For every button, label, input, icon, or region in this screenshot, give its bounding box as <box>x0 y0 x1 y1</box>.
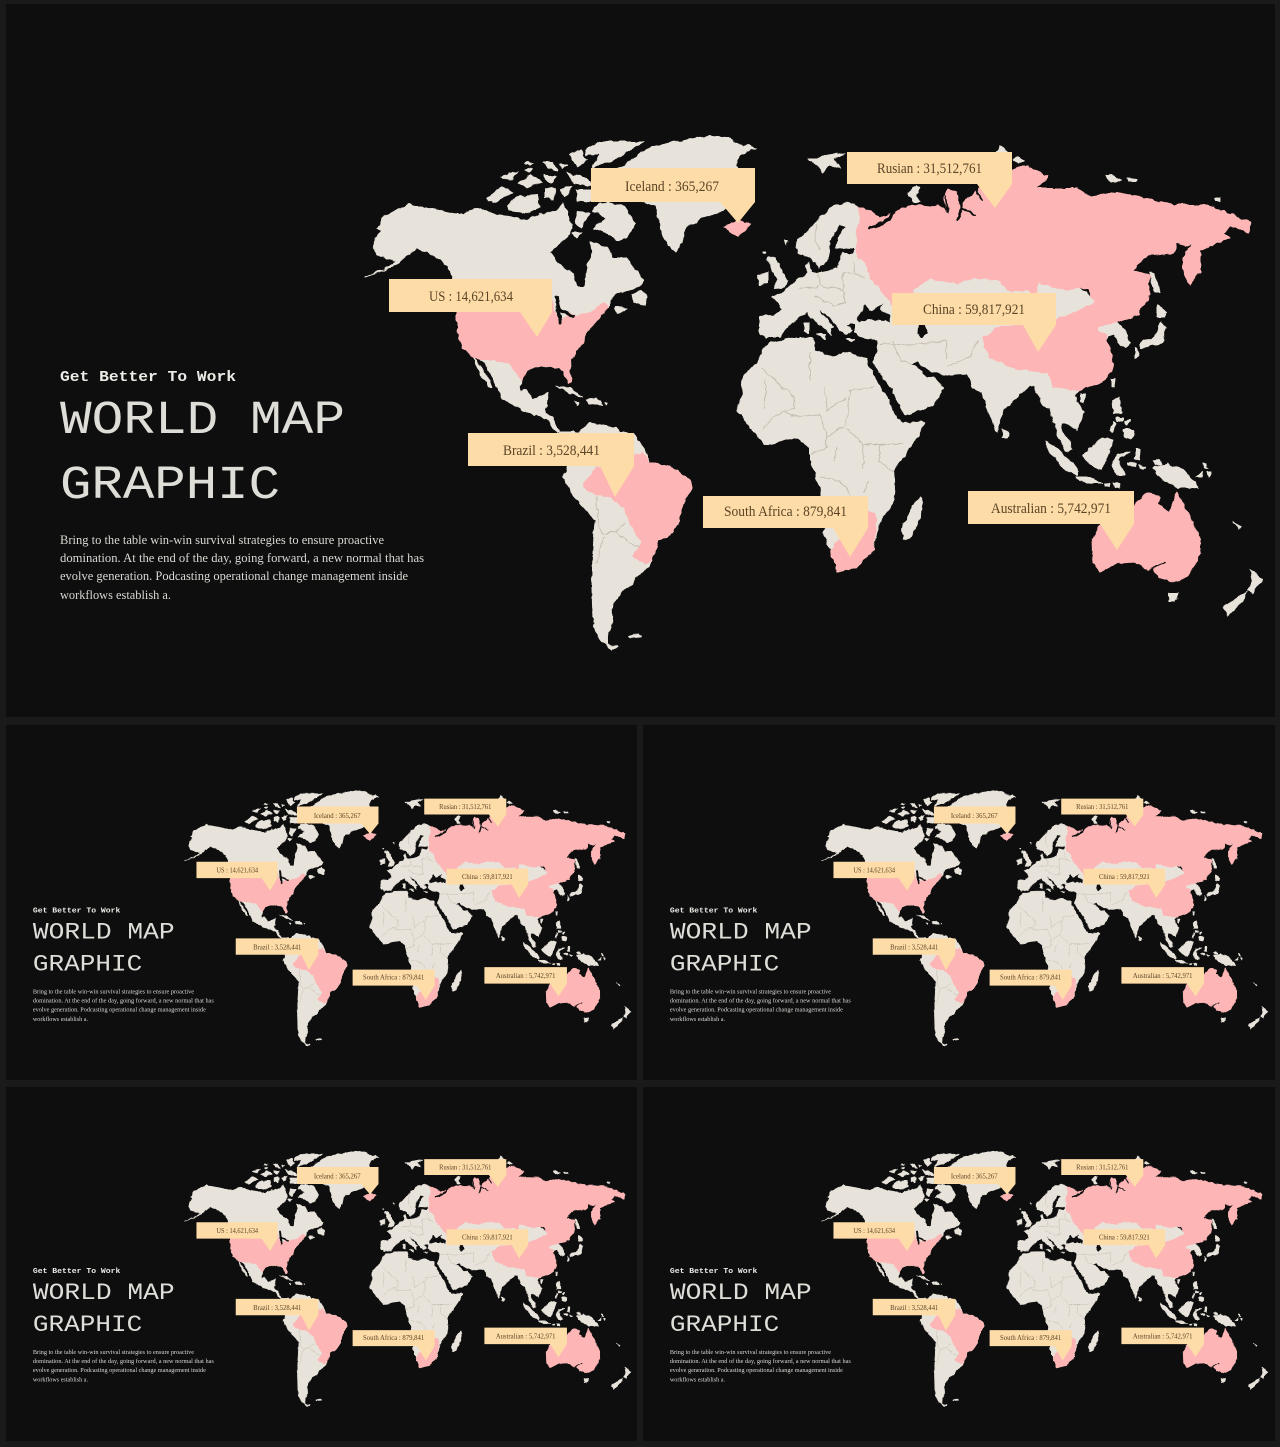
thumbnail content: Get Better To Work <box>670 907 758 915</box>
callout: Australia: Australian : 5,742,971 <box>991 501 1111 517</box>
thumbnail content: China : 59,817,921 <box>462 873 513 881</box>
thumbnail content: US : 14,621,634 <box>216 1227 258 1235</box>
thumbnail content: domination. At the end of the day, going forward, a new normal that has <box>33 997 214 1004</box>
thumbnail content: South Africa : 879,841 <box>1000 1334 1062 1342</box>
thumbnail content: Australian : 5,742,971 <box>1133 1333 1193 1341</box>
thumbnail content: Iceland : 365,267 <box>951 1172 998 1180</box>
thumbnail content <box>670 1151 1268 1407</box>
thumbnail content <box>670 790 1268 1046</box>
callout: China: China : 59,817,921 <box>923 302 1025 318</box>
thumbnail content: South Africa : 879,841 <box>363 1334 425 1342</box>
thumbnail content: WORLD MAP <box>33 920 175 946</box>
thumbnail content: GRAPHIC <box>670 1313 779 1339</box>
thumbnail content: Get Better To Work <box>670 1268 758 1276</box>
thumbnail content: WORLD MAP <box>670 920 812 946</box>
callout: Brazil: Brazil : 3,528,441 <box>503 443 600 459</box>
thumbnail content: Rusian : 31,512,761 <box>1076 1164 1129 1172</box>
thumbnail content: domination. At the end of the day, going forward, a new normal that has <box>670 997 851 1004</box>
thumbnail content: Rusian : 31,512,761 <box>1076 803 1129 811</box>
panel: thumbnail top right <box>643 725 1275 1080</box>
callout: US: US : 14,621,634 <box>429 289 514 305</box>
thumbnail content: Brazil : 3,528,441 <box>890 1304 939 1312</box>
thumbnail content: GRAPHIC <box>33 953 142 979</box>
body text: evolve generation. Podcasting operational change management inside <box>60 569 408 583</box>
callout: Russia: Rusian : 31,512,761 <box>877 161 982 177</box>
subtitle: Get Better To Work <box>60 369 236 386</box>
thumbnail content: workflows establish a. <box>33 1376 88 1383</box>
thumbnail content: Get Better To Work <box>33 907 121 915</box>
thumbnail content: Brazil : 3,528,441 <box>890 943 939 951</box>
thumbnail content: GRAPHIC <box>670 953 779 979</box>
thumbnail content: evolve generation. Podcasting operational change management inside <box>670 1367 843 1374</box>
thumbnail content <box>33 1151 631 1407</box>
thumbnail content: evolve generation. Podcasting operational change management inside <box>33 1367 206 1374</box>
title: GRAPHIC <box>60 460 280 513</box>
thumbnail content: US : 14,621,634 <box>853 1227 895 1235</box>
thumbnail content: Bring to the table win-win survival strategies to ensure proactive <box>670 1349 831 1356</box>
panel: thumbnail top left <box>6 725 637 1080</box>
thumbnail content: China : 59,817,921 <box>462 1234 513 1242</box>
thumbnail content: workflows establish a. <box>670 1016 725 1023</box>
body text <box>60 533 424 602</box>
thumbnail content: domination. At the end of the day, going forward, a new normal that has <box>33 1358 214 1365</box>
thumbnail content: Australian : 5,742,971 <box>1133 972 1193 980</box>
thumbnail content: South Africa : 879,841 <box>1000 974 1062 982</box>
thumbnail content: Iceland : 365,267 <box>314 812 361 820</box>
thumbnail content: Bring to the table win-win survival strategies to ensure proactive <box>33 1349 194 1356</box>
thumbnail content: workflows establish a. <box>33 1016 88 1023</box>
thumbnail content: US : 14,621,634 <box>216 867 258 875</box>
thumbnail content: domination. At the end of the day, going forward, a new normal that has <box>670 1358 851 1365</box>
thumbnail content: Bring to the table win-win survival strategies to ensure proactive <box>33 989 194 996</box>
thumbnail content: China : 59,817,921 <box>1099 1234 1150 1242</box>
thumbnail content <box>33 790 631 1046</box>
thumbnail content: Bring to the table win-win survival strategies to ensure proactive <box>670 989 831 996</box>
thumbnail content: evolve generation. Podcasting operational change management inside <box>670 1006 843 1013</box>
thumbnail content: GRAPHIC <box>33 1313 142 1339</box>
body text: workflows establish a. <box>60 588 171 602</box>
title: WORLD MAP <box>60 395 345 448</box>
body text: domination. At the end of the day, going forward, a new normal that has <box>60 551 424 565</box>
panel: thumbnail bottom right <box>643 1087 1275 1441</box>
thumbnail content: Australian : 5,742,971 <box>496 972 556 980</box>
thumbnail content: South Africa : 879,841 <box>363 974 425 982</box>
thumbnail content: Rusian : 31,512,761 <box>439 803 492 811</box>
thumbnail content: Brazil : 3,528,441 <box>253 943 302 951</box>
thumbnail content: Iceland : 365,267 <box>314 1172 361 1180</box>
thumbnail content: China : 59,817,921 <box>1099 873 1150 881</box>
thumbnail content: Rusian : 31,512,761 <box>439 1164 492 1172</box>
thumbnail content: Australian : 5,742,971 <box>496 1333 556 1341</box>
body text: Bring to the table win-win survival strategies to ensure proactive <box>60 533 384 547</box>
thumbnail content: Get Better To Work <box>33 1268 121 1276</box>
callout: Iceland: Iceland : 365,267 <box>625 179 719 195</box>
thumbnail content: Iceland : 365,267 <box>951 812 998 820</box>
callout: South Africa: South Africa : 879,841 <box>724 504 847 520</box>
thumbnail content: workflows establish a. <box>670 1376 725 1383</box>
thumbnail content: WORLD MAP <box>33 1281 175 1307</box>
callout shapes <box>389 152 1134 557</box>
world map <box>365 135 1262 650</box>
thumbnail content: Brazil : 3,528,441 <box>253 1304 302 1312</box>
thumbnail content: WORLD MAP <box>670 1281 812 1307</box>
panel: thumbnail bottom left <box>6 1087 637 1441</box>
thumbnail content: evolve generation. Podcasting operational change management inside <box>33 1006 206 1013</box>
title <box>60 395 345 513</box>
panel: main slide <box>6 4 1275 717</box>
thumbnail content: US : 14,621,634 <box>853 867 895 875</box>
